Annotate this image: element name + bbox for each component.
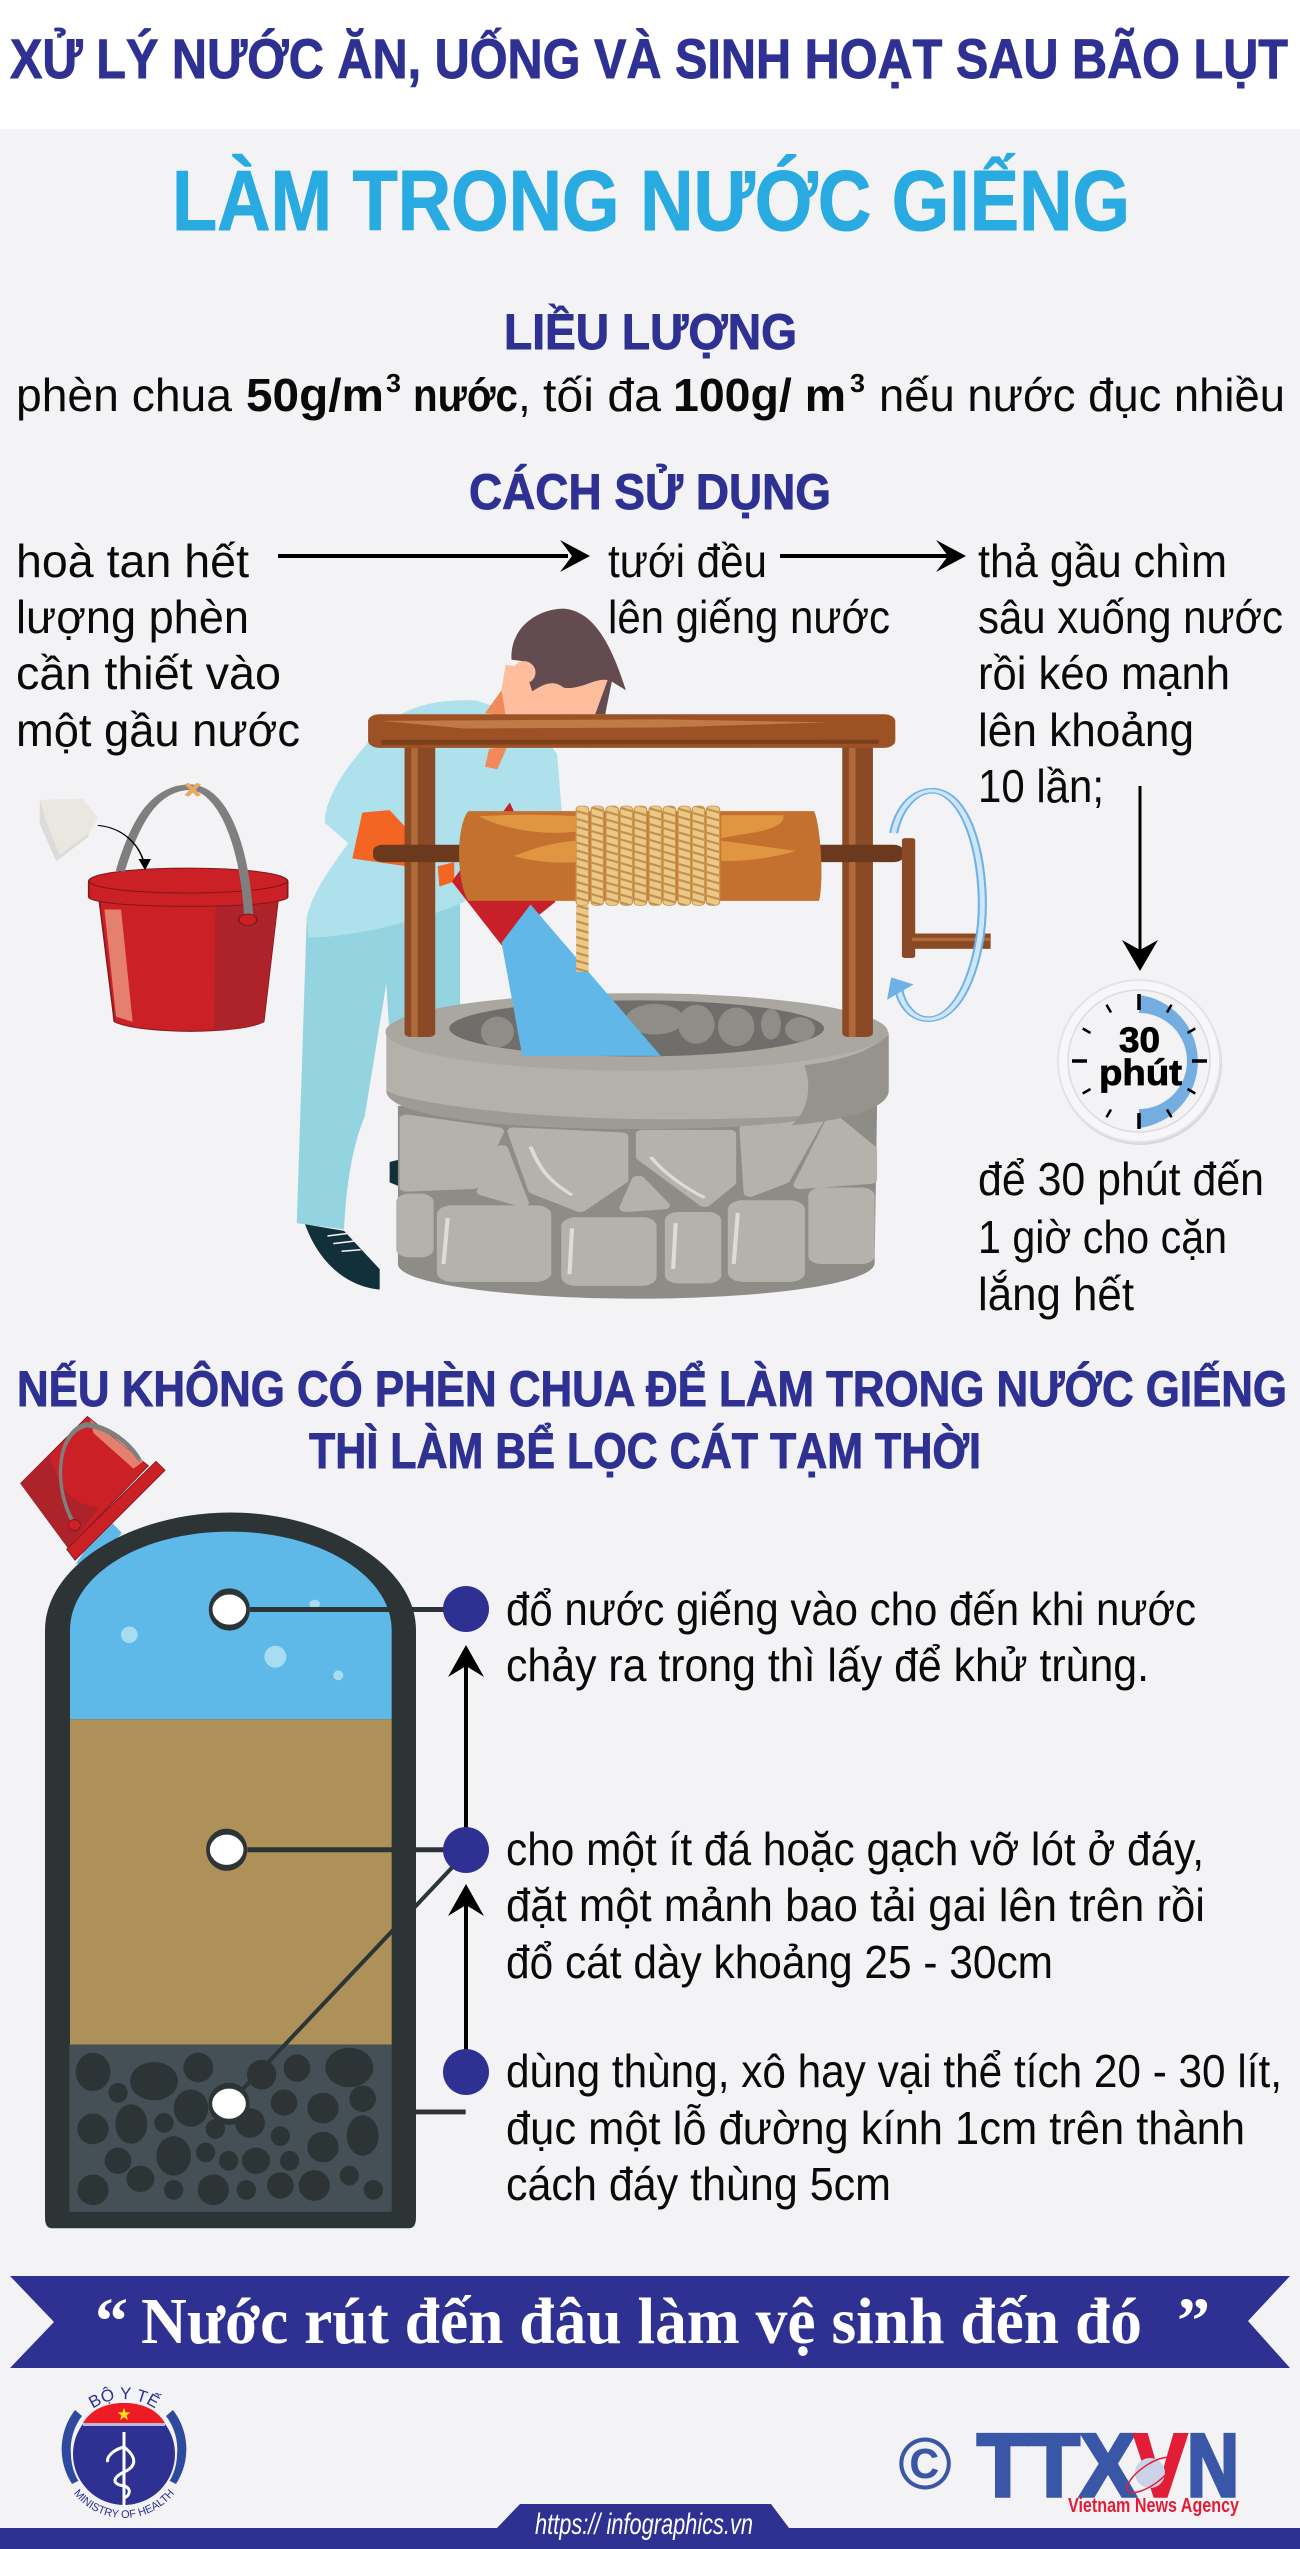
- blue step markers: [443, 1586, 489, 2095]
- filter step: add sand: đặt một mảnh bao tải gai lên trên rồi: [506, 1879, 1205, 1931]
- well: [385, 993, 889, 1299]
- icon: 30 minute timer: phút: [1099, 1052, 1182, 1093]
- marker dots in tank: [208, 1591, 248, 2122]
- step 3 text: lên khoảng: [978, 704, 1194, 756]
- pouring bucket: [21, 1416, 165, 1565]
- section heading: sand filter: THÌ LÀM BỂ LỌC CÁT TẠM THỜI: [309, 1423, 981, 1479]
- slogan banner: ”: [1177, 2285, 1210, 2358]
- arrows between filter steps: [448, 1645, 484, 2072]
- dosage text: nếu nước đục nhiều: [879, 369, 1285, 421]
- logo: TTXVN: TTX: [977, 2415, 1136, 2515]
- tank: [45, 1512, 416, 2228]
- logo: TTXVN: N: [1187, 2415, 1239, 2515]
- step 1 text: [16, 535, 300, 756]
- water layer: [70, 1532, 392, 1719]
- logo: Ministry of Health: [62, 2386, 186, 2518]
- gravel layer: [69, 2044, 392, 2212]
- step 2 text: [608, 535, 890, 643]
- illustration: red bucket with alum: [40, 784, 288, 1031]
- filter step: add sand: [506, 1823, 1205, 1988]
- step 1 text: cần thiết vào: [16, 647, 281, 699]
- filter step: add sand: cho một ít đá hoặc gạch vỡ lót ở đáy,: [506, 1823, 1204, 1875]
- section heading: sand filter: [17, 1360, 1287, 1479]
- filter step: container: đục một lỗ đường kính 1cm trên thành: [506, 2102, 1245, 2154]
- logo: TTXVN: [977, 2415, 1240, 2517]
- heading: usage: CÁCH SỬ DỤNG: [469, 463, 831, 520]
- heading: dosage: LIỀU LƯỢNG: [504, 304, 797, 360]
- arrow: rotation: [887, 791, 982, 1019]
- filter step: pour water: [506, 1583, 1196, 1691]
- main heading: LÀM TRONG NƯỚC GIẾNG: [172, 153, 1130, 249]
- header band with title: [0, 0, 1300, 129]
- copyright symbol: ©: [898, 2424, 952, 2505]
- logo: TTXVN: V: [1134, 2415, 1187, 2515]
- illustration: sand filter tank: [21, 1416, 466, 2228]
- dosage text: 50g/m: [246, 369, 384, 421]
- wooden frame and windlass: [368, 714, 991, 1056]
- step 2 text: lên giếng nước: [608, 591, 890, 643]
- footer bar with website: https:// infographics.vn: [535, 2508, 753, 2541]
- sand layer: [70, 1719, 392, 2044]
- filter step: pour water: chảy ra trong thì lấy để khử trùng.: [506, 1639, 1149, 1691]
- filter step: pour water: đổ nước giếng vào cho đến khi nước: [506, 1583, 1196, 1635]
- dosage text: phèn chua: [16, 369, 232, 421]
- logo: Ministry of Health: BỘ Y TẾ: [88, 2386, 162, 2408]
- arrow: step 1 to step 2: [278, 540, 590, 572]
- step 1 text: một gầu nước: [16, 704, 300, 756]
- step 3 text: thả gầu chìm: [978, 535, 1227, 587]
- filter step: container: [506, 2045, 1282, 2210]
- dosage text: 100g/ m: [673, 369, 846, 421]
- slogan banner: [10, 2276, 1290, 2368]
- footer bar with website: [0, 2504, 1300, 2549]
- arrow: step 3 down to timer: [1122, 786, 1158, 971]
- settle time text: để 30 phút đến: [978, 1153, 1264, 1205]
- arrow: step 2 to step 3: [780, 540, 966, 572]
- filter step: container: cách đáy thùng 5cm: [506, 2158, 891, 2210]
- dosage text: nước: [413, 369, 518, 421]
- icon: 30 minute timer: 30: [1119, 1021, 1160, 1060]
- step 3 text: 10 lần;: [978, 760, 1104, 812]
- step 3 text: rồi kéo mạnh: [978, 647, 1230, 699]
- illustration: person and well: [297, 609, 991, 1299]
- step 3 text: [978, 535, 1283, 812]
- dosage text: ,: [518, 369, 531, 421]
- settle time text: [978, 1153, 1264, 1320]
- dosage text: [16, 368, 1285, 421]
- logo: TTXVN: Vietnam News Agency: [1068, 2495, 1240, 2517]
- icon: 30 minute timer: [1058, 980, 1222, 1145]
- slogan banner: Nước rút đến đâu làm vệ sinh đến đó: [141, 2285, 1142, 2358]
- dosage text: 3: [386, 368, 401, 398]
- settle time text: lắng hết: [978, 1268, 1134, 1320]
- logo: Ministry of Health: ★: [116, 2405, 132, 2424]
- step 2 text: tưới đều: [608, 535, 767, 587]
- slogan banner: “: [95, 2285, 128, 2358]
- filter step: add sand: đổ cát dày khoảng 25 - 30cm: [506, 1936, 1053, 1988]
- dosage text: tối đa: [543, 369, 661, 421]
- person: [297, 609, 626, 1290]
- step 1 text: lượng phèn: [16, 591, 249, 643]
- dosage text: 3: [850, 368, 865, 398]
- leader lines: [240, 1610, 466, 2112]
- settle time text: 1 giờ cho cặn: [978, 1211, 1227, 1263]
- logo: Ministry of Health: MINISTRY OF HEALTH: [74, 2489, 174, 2518]
- step 1 text: hoà tan hết: [16, 535, 249, 587]
